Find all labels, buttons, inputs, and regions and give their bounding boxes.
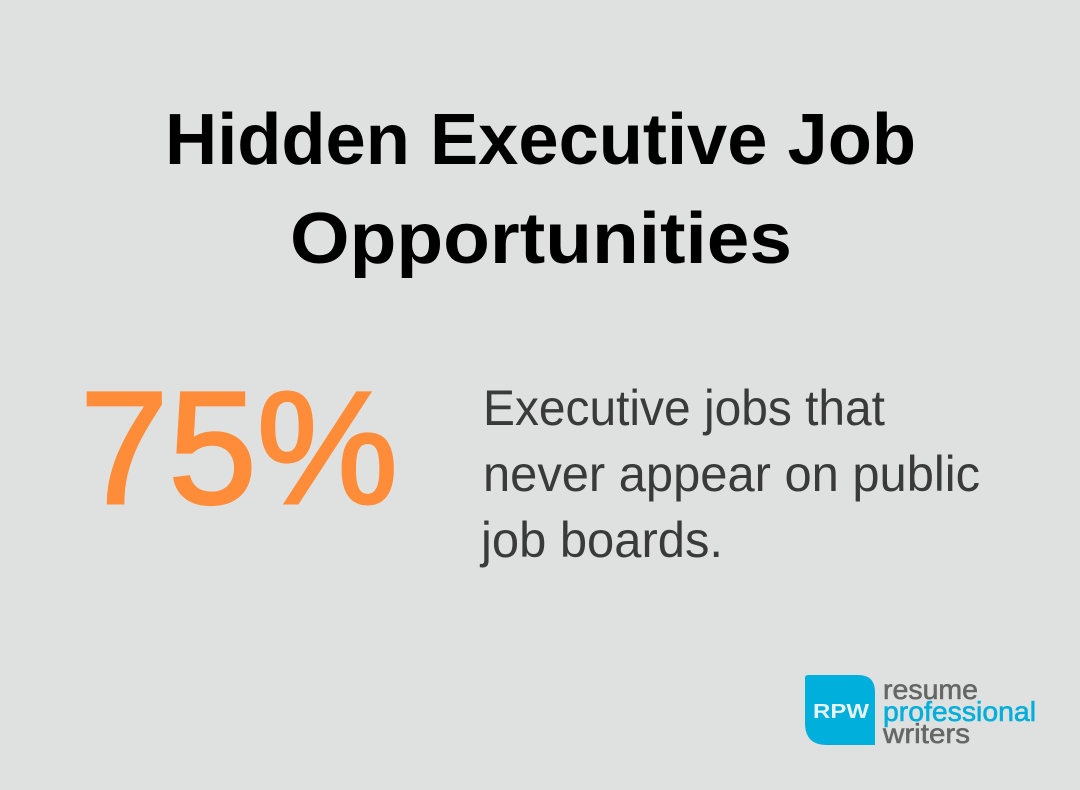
- statistic: 75%: 75%: [80, 358, 398, 537]
- logo badge: [805, 675, 875, 745]
- statistic description: never appear on public: [483, 446, 980, 502]
- logo wordmark: professional: [883, 696, 1036, 727]
- logo badge initials: RPW: [813, 701, 869, 723]
- statistic description: [479, 380, 980, 568]
- logo: resume professional writers: [805, 674, 1036, 749]
- title: Hidden Executive Job: [165, 100, 916, 180]
- statistic description: Executive jobs that: [483, 380, 885, 436]
- logo wordmark: resume: [883, 674, 978, 705]
- title: [165, 100, 916, 279]
- logo wordmark: [882, 674, 1036, 749]
- statistic description: job boards.: [479, 512, 723, 568]
- logo wordmark: writers: [882, 718, 970, 749]
- title: Opportunities: [290, 199, 792, 279]
